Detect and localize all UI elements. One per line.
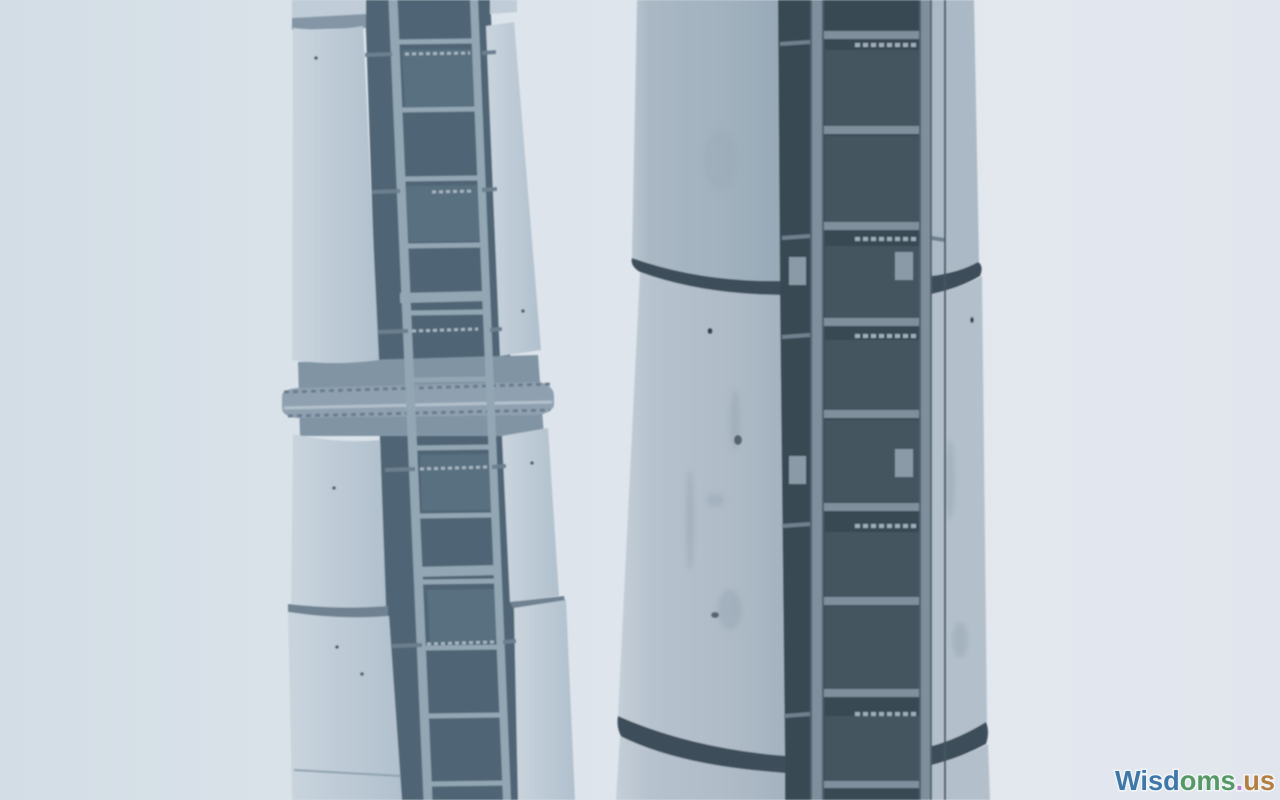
right tower: [616, 0, 990, 800]
right tower clamps: [855, 45, 918, 714]
left tower clamps: [405, 53, 494, 644]
small dark marks on panel: [708, 317, 974, 618]
left tower dark core: [365, 0, 520, 800]
left tower flange collar: [282, 355, 554, 436]
dark panels between rungs: [825, 50, 919, 782]
ladder rail edges: [810, 0, 932, 800]
brackets: [789, 252, 913, 484]
left tower core shading bands: [402, 49, 500, 643]
left tower ladder: [393, 0, 507, 800]
right tower dark joint band, right: [932, 262, 982, 294]
right tower left panel, lower: [616, 736, 785, 800]
left tower panels, left side: [288, 0, 402, 800]
left tower panels, right side: [486, 0, 575, 800]
right tower dark joint band, lower right: [932, 722, 988, 765]
right tower ladder: [810, 0, 932, 800]
right tower right panel, upper: [932, 0, 979, 276]
left tower bolts: [314, 56, 534, 676]
left tower: [282, 0, 575, 800]
right tower left panel, upper: [632, 0, 780, 281]
right tower dark core: [778, 0, 934, 800]
right tower left panel, middle: [618, 272, 785, 756]
right tower dark joint band, lower left: [618, 716, 785, 773]
right tower dark joint band, left: [632, 258, 780, 295]
surface stains: [686, 130, 968, 658]
thin cable: [944, 0, 946, 800]
right tower right panel, middle: [932, 276, 987, 746]
right tower right panel, lower: [932, 744, 990, 800]
logo: Wisdoms.us: Wisdoms.us: [1115, 765, 1275, 796]
